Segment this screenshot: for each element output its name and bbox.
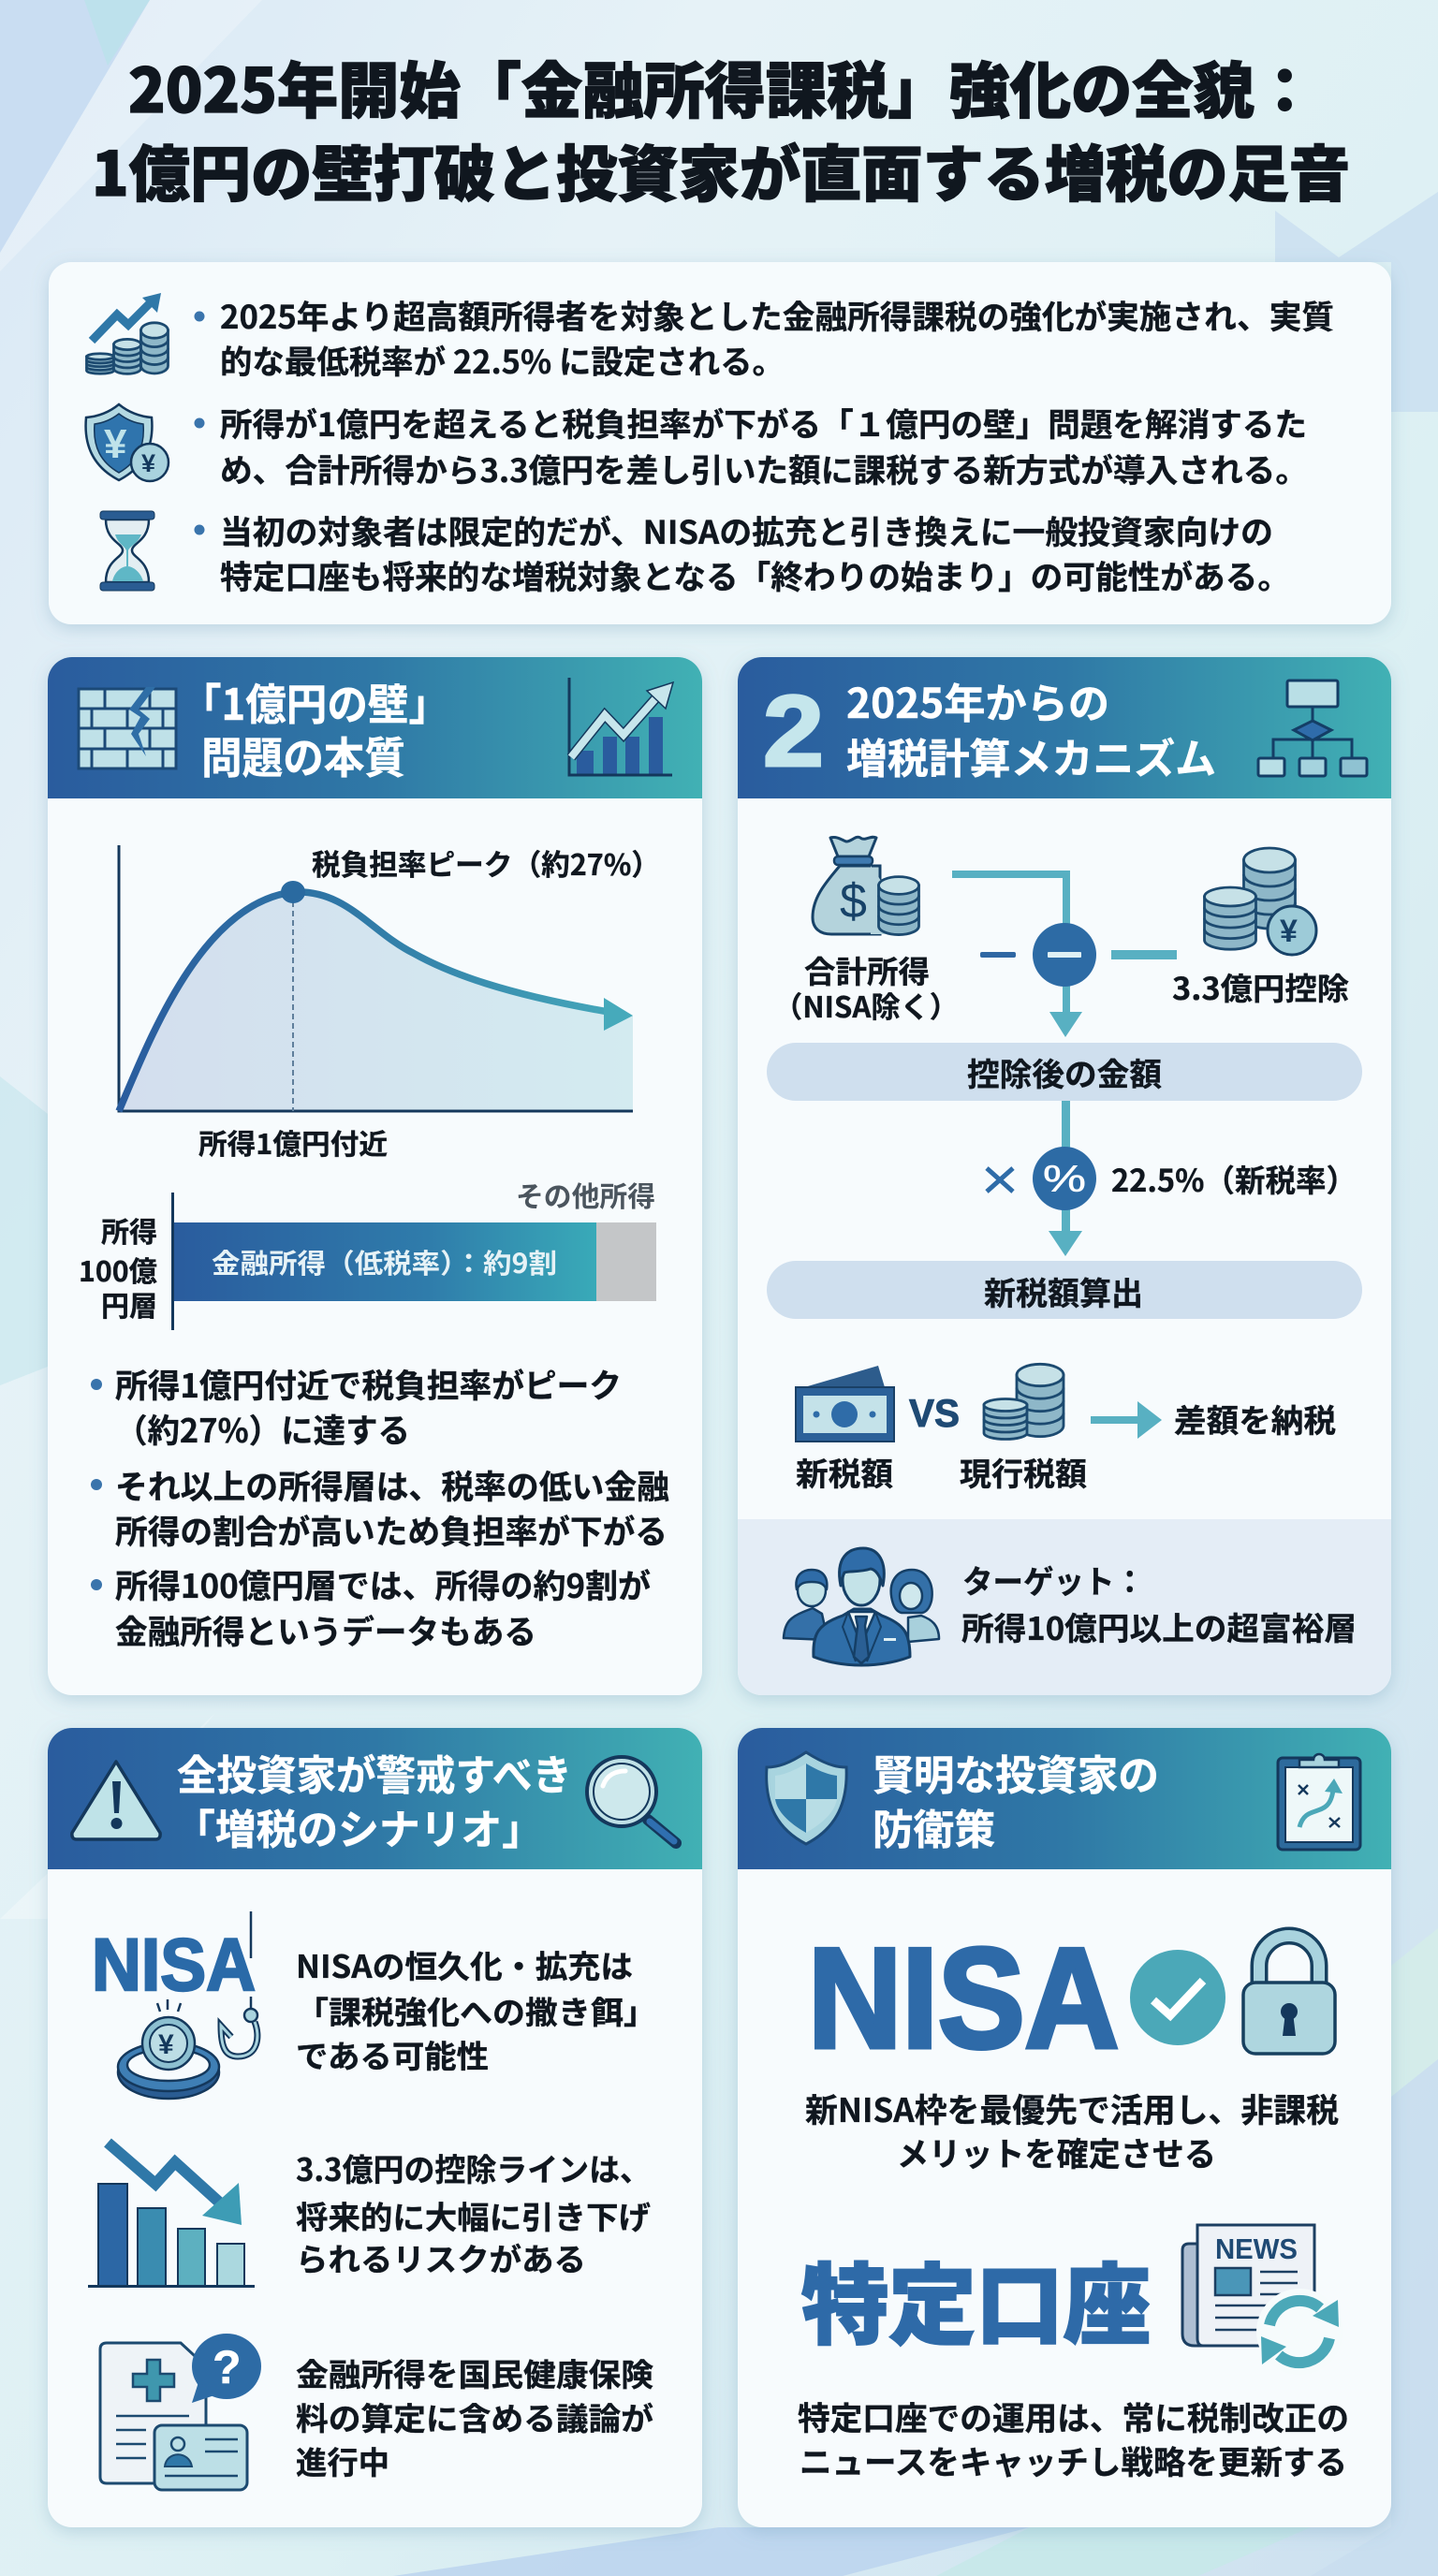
line chart: tax burden curve: 所得1億円付近 <box>198 1121 388 1163</box>
icon: cracked wall <box>79 687 176 768</box>
stacked bar: income mix: その他所得 <box>516 1174 655 1215</box>
summary text: 特定口座も将来的な増税対象となる「終わりの始まり」の可能性がある。 <box>220 551 1290 598</box>
icon: money bag and coins: $ <box>840 874 867 929</box>
icon: yen shield <box>86 404 169 481</box>
stacked bar: income mix <box>79 1174 656 1330</box>
target group: ターゲット： <box>962 1557 1145 1603</box>
block: NISA strategy: メリットを確定させる <box>897 2129 1216 2176</box>
text: NISA bait: NISAの恒久化・拡充は <box>296 1941 633 1987</box>
header title: 賢明な投資家の <box>873 1742 1159 1802</box>
target group: 所得10億円以上の超富裕層 <box>961 1603 1357 1649</box>
bullet list <box>91 1360 669 1654</box>
block: specific account strategy: 特定口座 <box>801 2235 1151 2363</box>
bullet dots <box>195 311 204 535</box>
stacked bar: income mix: 円層 <box>101 1283 157 1325</box>
panel: 防衛策 <box>738 1728 1391 2527</box>
icon: health insurance documents: ? <box>213 2341 242 2393</box>
icon: warning <box>72 1762 160 1839</box>
step pill: after deduction <box>767 1043 1362 1101</box>
text: health insurance: 金融所得を国民健康保険 <box>296 2349 654 2395</box>
summary text <box>220 291 1334 598</box>
summary text: 当初の対象者は限定的だが、NISAの拡充と引き換えに一般投資家向けの <box>220 506 1273 553</box>
panel header <box>738 657 1391 798</box>
block: NISA strategy: NISA <box>808 1919 1119 2078</box>
stacked bar: income mix: 100億 <box>79 1249 157 1290</box>
icon: hourglass <box>100 511 154 591</box>
icon: yen shield: ¥ <box>104 421 127 467</box>
number 2: 2 <box>763 674 824 787</box>
comparison: new tax vs current tax <box>795 1364 1336 1495</box>
summary text: 的な最低税率が 22.5% に設定される。 <box>220 336 785 383</box>
bullet list: 所得の割合が高いため負担率が下がる <box>115 1506 668 1554</box>
title <box>92 42 1350 213</box>
panel: 増税計算メカニズム <box>738 657 1391 1695</box>
block: specific account strategy <box>798 2225 1349 2483</box>
panel header <box>48 1728 702 1869</box>
target group <box>784 1548 1357 1665</box>
flow connector: tax rate step: 22.5%（新税率） <box>1111 1156 1357 1201</box>
text: health insurance: 進行中 <box>296 2437 389 2483</box>
title: 1億円の壁打破と投資家が直面する増税の足音 <box>92 125 1350 213</box>
comparison: new tax vs current tax: 現行税額 <box>960 1449 1087 1495</box>
icon: yen shield: ¥ <box>141 449 155 477</box>
header title <box>174 1742 572 1856</box>
icon: flow chart <box>1258 681 1367 776</box>
icon: falling bars <box>88 2143 255 2288</box>
block: NISA strategy <box>805 1919 1339 2176</box>
panel: 1億円の壁 <box>48 657 702 1695</box>
flow connector: tax rate step <box>987 1101 1357 1256</box>
text: health insurance: 料の算定に含める議論が <box>296 2393 653 2439</box>
panel header <box>738 1728 1391 1869</box>
header title: 「1億円の壁」 <box>181 671 449 733</box>
step pill: new tax <box>767 1261 1362 1319</box>
bullet list: 金融所得というデータもある <box>115 1606 536 1654</box>
text: deduction risk: 3.3億円の控除ラインは、 <box>296 2144 651 2190</box>
header title: 問題の本質 <box>201 724 405 786</box>
header title <box>846 670 1216 785</box>
icon: NISA bait hook: ¥ <box>158 2029 174 2060</box>
bullet list: （約27%）に達する <box>115 1405 410 1453</box>
flow connector: tax rate step: % <box>1043 1159 1086 1200</box>
panel: summary <box>49 262 1391 624</box>
icon: strategy clipboard <box>1278 1754 1360 1850</box>
title: 2025年開始「金融所得課税」強化の全貌： <box>128 42 1315 130</box>
stacked bar: income mix: 所得 <box>101 1209 157 1251</box>
text: NISA bait <box>296 1941 656 2077</box>
header title <box>873 1742 1159 1856</box>
step pill: new tax: 新税額算出 <box>984 1268 1143 1314</box>
icon: rising coins <box>86 293 169 373</box>
bullet list: それ以上の所得層は、税率の低い金融 <box>115 1461 669 1509</box>
bullet list: 所得100億円層では、所得の約9割が <box>115 1560 651 1608</box>
icon: news refresh: NEWS <box>1215 2232 1298 2265</box>
step pill: after deduction: 控除後の金額 <box>967 1049 1162 1095</box>
bullet list: 所得1億円付近で税負担率がピーク <box>115 1360 622 1408</box>
panel header <box>48 657 702 798</box>
summary text: 2025年より超高額所得者を対象とした金融所得課税の強化が実施され、実質 <box>220 291 1334 338</box>
target band <box>738 1519 1391 1695</box>
panel: 増税のシナリオ <box>48 1728 702 2527</box>
icon: NISA bait hook <box>92 1911 257 2099</box>
text: deduction risk <box>296 2144 652 2280</box>
label: deduction: 3.3億円控除 <box>1172 964 1349 1009</box>
block: specific account strategy: ニュースをキャッチし戦略を更新する <box>800 2437 1347 2483</box>
summary text: 所得が1億円を超えると税負担率が下がる「１億円の壁」問題を解消するた <box>220 399 1307 446</box>
icon: shield <box>767 1752 846 1844</box>
flow connector: minus step <box>952 874 1177 1037</box>
icon: NISA bait hook: NISA <box>92 1923 256 2006</box>
block: specific account strategy: 特定口座での運用は、常に税制改正の <box>798 2393 1349 2439</box>
stacked bar: income mix: 金融所得（低税率）：約9割 <box>212 1242 557 1281</box>
header title: 2025年からの <box>846 670 1109 730</box>
comparison: new tax vs current tax: VS <box>909 1391 960 1435</box>
icon: news refresh <box>1182 2225 1343 2375</box>
header title: 防衛策 <box>873 1796 995 1856</box>
header title: 全投資家が警戒すべき <box>177 1742 572 1802</box>
icon: health insurance documents <box>100 2334 261 2490</box>
icon: business people <box>784 1548 939 1665</box>
icon: padlock <box>1243 1936 1335 2054</box>
label: total income: （NISA除く） <box>773 984 959 1026</box>
header title <box>181 671 449 786</box>
header title: 「増税のシナリオ」 <box>174 1796 543 1856</box>
comparison: new tax vs current tax: 新税額 <box>796 1449 893 1495</box>
text: NISA bait: である可能性 <box>296 2031 489 2077</box>
icon: coins with yen: ¥ <box>1280 914 1298 949</box>
text: deduction risk: 将来的に大幅に引き下げ <box>296 2192 652 2238</box>
icon: magnifier <box>587 1757 676 1843</box>
line chart: tax burden curve <box>119 842 660 1163</box>
line chart: tax burden curve: 税負担率ピーク（約27%） <box>312 842 660 884</box>
icon: money bag and coins <box>813 837 919 935</box>
text: deduction risk: られるリスクがある <box>296 2234 586 2280</box>
icon: rising chart <box>569 678 673 775</box>
summary text: め、合計所得から3.3億円を差し引いた額に課税する新方式が導入される。 <box>220 445 1308 491</box>
text: NISA bait: 「課税強化への撒き餌」 <box>296 1987 656 2033</box>
header title: 増税計算メカニズム <box>846 725 1216 785</box>
label: total income <box>773 947 959 1026</box>
block: NISA strategy: 新NISA枠を最優先で活用し、非課税 <box>805 2085 1339 2132</box>
comparison: new tax vs current tax: 差額を納税 <box>1174 1396 1336 1442</box>
icon: coins with yen <box>1204 848 1316 955</box>
text: health insurance <box>296 2349 654 2483</box>
label: total income: 合計所得 <box>804 947 930 992</box>
icon: check <box>1130 1950 1225 2045</box>
